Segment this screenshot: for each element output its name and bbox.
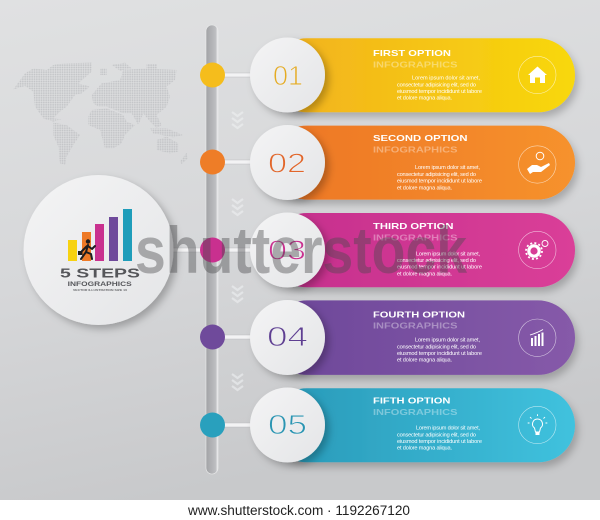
step 3 panel [200,212,575,288]
body text 1: consectetur adipisicing elit, sed do [397,82,476,88]
body text 2: et dolore magna aliqua. [397,185,452,191]
heading 3: THIRD OPTION [373,221,454,231]
vertical timeline rail [206,25,218,474]
body text 5 [397,426,482,452]
connectors from rail to step discs [170,73,254,427]
footer band [0,500,600,520]
body text 5: consectetur adipisicing elit, sed do [397,432,476,438]
number 02: 02 [268,148,306,179]
body text 2: eiusmod tempor incididunt ut labore [397,179,482,185]
body text 1: et dolore magna aliqua. [397,96,452,102]
central circle badge [24,175,174,325]
body text 3: consectetur adipisicing elit, sed do [397,258,476,264]
body text 5: et dolore magna aliqua. [397,446,452,452]
body text 1: eiusmod tempor incididunt ut labore [397,89,482,95]
icon: running businessman [78,239,95,259]
chevrons between steps [232,112,243,390]
subheading 2: INFOGRAPHICS [373,144,458,154]
body text 4: consectetur adipisicing elit, sed do [397,344,476,350]
badge subtitle: INFOGRAPHICS [68,282,132,288]
timeline dot 1 [200,62,225,88]
number disc 4 [250,300,325,375]
body text 1: Lorem ipsum dolor sit amet, [412,76,480,82]
subheading 4: INFOGRAPHICS [373,320,458,330]
body text 2: consectetur adipisicing elit, sed do [397,172,476,178]
number 03: 03 [268,234,306,266]
badge caption: VECTOR ILLUSTRATION SIZE 10 [73,288,127,292]
number 04: 04 [267,321,308,352]
heading 4: FOURTH OPTION [373,309,465,319]
icon: home [519,56,556,94]
number disc 2 [250,125,325,200]
heading 2: SECOND OPTION [373,133,468,143]
step 4 panel [200,300,575,375]
icon: growth chart [519,319,556,356]
subheading 3: INFOGRAPHICS [373,233,458,243]
body text 2: Lorem ipsum dolor sit amet, [415,165,480,171]
dotted world map [13,63,188,165]
body text 4 [397,338,482,364]
icon: hand with coin [519,146,556,183]
body text 4: et dolore magna aliqua. [397,358,452,364]
timeline dot 5 [200,412,225,438]
bar chart logo [68,209,132,261]
number disc 3 [250,212,325,288]
body text 3: Lorem ipsum dolor sit amet, [416,251,480,257]
body text 3 [397,251,482,277]
step 2 panel [200,125,575,200]
number 01: 01 [273,60,303,91]
subheading 5: INFOGRAPHICS [373,407,458,417]
heading 5: FIFTH OPTION [373,395,450,405]
number disc 5 [250,388,325,462]
body text 1 [397,76,482,102]
body text 4: eiusmod tempor incididunt ut labore [397,351,482,357]
step 5 panel [200,388,575,462]
timeline dot 4 [200,324,225,350]
footer text: www.shutterstock.com · 1192267120 [187,503,410,518]
body text 5: eiusmod tempor incididunt ut labore [397,439,482,445]
body text 5: Lorem ipsum dolor sit amet, [416,426,480,432]
number 05: 05 [268,409,307,440]
body text 2 [397,165,482,191]
number disc 1 [250,38,325,112]
step 1 panel [200,38,575,112]
body text 3: eiusmod tempor incididunt ut labore [397,265,482,271]
body text 3: et dolore magna aliqua. [397,271,452,277]
timeline dot 3 [200,238,225,262]
heading 1: FIRST OPTION [373,48,451,58]
subheading 1: INFOGRAPHICS [373,60,458,70]
watermark: shutterstock [135,213,467,287]
timeline dot 2 [200,150,225,174]
badge title: 5 STEPS [60,267,140,281]
icon: light bulb [519,406,556,444]
icon: gears [519,231,556,269]
body text 4: Lorem ipsum dolor sit amet, [415,338,480,344]
